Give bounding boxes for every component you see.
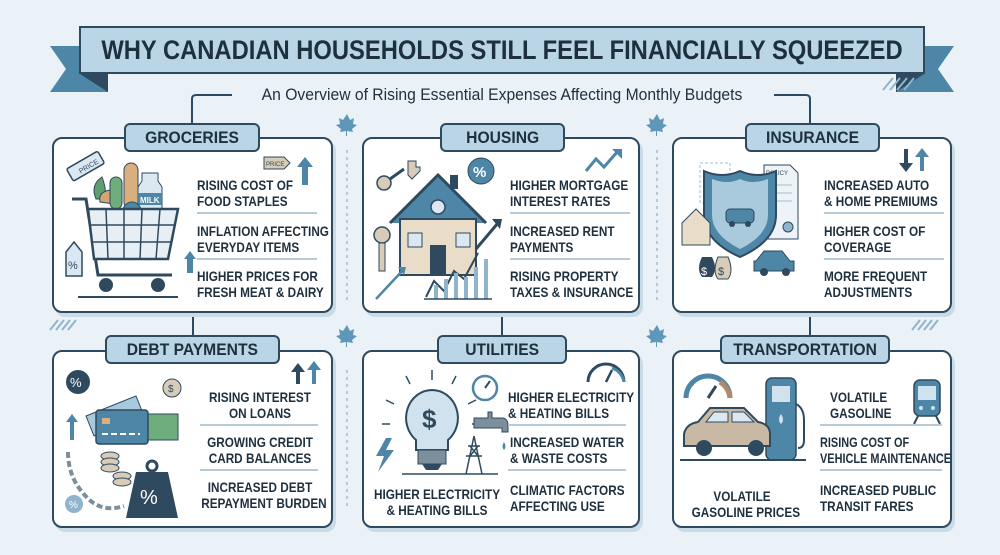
text: housing items: HIGHER MORTGAGE [510,177,628,193]
panel: transportation [672,350,952,528]
text: insurance items [824,177,938,209]
icon: car, gauge, fuel pump [680,374,806,461]
panel: utilities: CLIMATIC FACTORS [510,482,625,498]
icon: house with keys and chart [373,158,502,300]
text: debt items [209,389,311,421]
tab: insurance: INSURANCE [766,128,859,147]
icon: bus [913,379,941,424]
panel: transportation: VEHICLE MAINTENANCE [820,450,951,466]
text: utilities caption [374,486,500,518]
panel: utilities: INCREASED WATER [510,434,624,450]
icon: shield with policy and car: POLICY [766,171,788,177]
panel: debt payments: CARD BALANCES [209,450,311,466]
panel: insurance [672,137,952,313]
tab: utilities: UTILITIES [465,340,539,359]
icon: cards, coins, chain, weight: % [140,487,158,509]
panel: groceries: EVERYDAY ITEMS [197,239,299,255]
panel: housing: PAYMENTS [510,239,573,255]
text: utilities items: & HEATING BILLS [508,405,609,421]
panel: debt payments: REPAYMENT BURDEN [201,495,327,511]
text: transportation items: GASOLINE [830,405,891,421]
panel: transportation: RISING COST OF [820,434,909,450]
panel: insurance: MORE FREQUENT [824,268,927,284]
icon: light bulb, tap, pylon [376,370,508,475]
icon: shield with policy and car [682,162,798,280]
icon: shield with policy and car: $ [718,266,724,278]
icon: shopping cart: PRICE [78,158,100,175]
icon: double up arrows [291,361,321,384]
icon: shield with policy and car: $ [701,266,707,278]
text: housing items: INTEREST RATES [510,193,610,209]
panel: housing: RISING PROPERTY [510,268,618,284]
tab: housing [440,123,565,152]
text: insurance items: & HOME PREMIUMS [824,193,938,209]
panel: transportation: TRANSIT FARES [820,498,913,514]
tab: housing: HOUSING [466,128,539,147]
text: utilities items [508,389,634,421]
panel: insurance: ADJUSTMENTS [824,284,912,300]
tab: utilities [437,335,567,364]
text: debt items: ON LOANS [229,405,291,421]
panel: debt payments [52,350,333,528]
panel: utilities: & WASTE COSTS [510,450,607,466]
icon: shopping cart: MILK [140,196,160,205]
title banner [50,26,954,92]
text: insurance items: INCREASED AUTO [824,177,929,193]
text: groceries items: RISING COST OF [197,177,293,193]
panel: housing: INCREASED RENT [510,223,615,239]
panel: transportation: INCREASED PUBLIC [820,482,936,498]
text: transportation caption: GASOLINE PRICES [692,504,800,520]
text: utilities caption: & HEATING BILLS [386,502,488,518]
text: groceries items: FOOD STAPLES [197,193,288,209]
panel: housing: TAXES & INSURANCE [510,284,633,300]
tab: transportation: TRANSPORTATION [733,340,877,359]
title banner: WHY CANADIAN HOUSEHOLDS STILL FEEL FINANCIALLY SQUEEZED [101,35,903,65]
icon: cards, coins, chain, weight: $ [168,384,174,395]
panel: groceries: FRESH MEAT & DAIRY [197,284,324,300]
text: transportation items [830,389,891,421]
tab: groceries [124,123,260,152]
icon: cards, coins, chain, weight [65,370,182,518]
text: transportation caption: VOLATILE [713,488,771,504]
tab: transportation [720,335,890,364]
tab: groceries: GROCERIES [145,128,239,147]
icon: price tag and up arrow [264,156,313,185]
panel: insurance: HIGHER COST OF [824,223,925,239]
text: transportation items: VOLATILE [830,389,887,405]
text: transportation caption [692,488,800,520]
tab: debt payments [105,335,280,364]
tab: debt payments: DEBT PAYMENTS [127,340,258,359]
panel: groceries [52,137,333,313]
icon: trend arrow [584,149,622,172]
panel: housing [362,137,640,313]
subtitle: An Overview of Rising Essential Expenses Affecting Monthly Budgets [262,86,742,104]
icon: house with keys and chart: % [473,164,486,181]
panel: groceries: INFLATION AFFECTING [197,223,329,239]
icon: shopping cart: % [68,260,78,272]
icon: arrows [899,148,929,172]
icon: shopping cart [65,151,196,298]
panel: debt payments: INCREASED DEBT [208,479,312,495]
text: housing items [510,177,628,209]
text: utilities caption: HIGHER ELECTRICITY [374,486,500,502]
icon: light bulb, tap, pylon: $ [422,404,437,434]
icon: price tag and up arrow: PRICE [266,162,284,168]
panel: utilities: AFFECTING USE [510,498,605,514]
text: utilities items: HIGHER ELECTRICITY [508,389,634,405]
text: groceries items [197,177,293,209]
panel: debt payments: GROWING CREDIT [207,434,313,450]
panel: groceries: HIGHER PRICES FOR [197,268,318,284]
icon: cards, coins, chain, weight: % [70,375,82,390]
icon: cards, coins, chain, weight: % [69,500,78,511]
tab: insurance [745,123,880,152]
panel: utilities [362,350,640,528]
icon: gauge [586,362,626,382]
panel: insurance: COVERAGE [824,239,891,255]
text: debt items: RISING INTEREST [209,389,311,405]
